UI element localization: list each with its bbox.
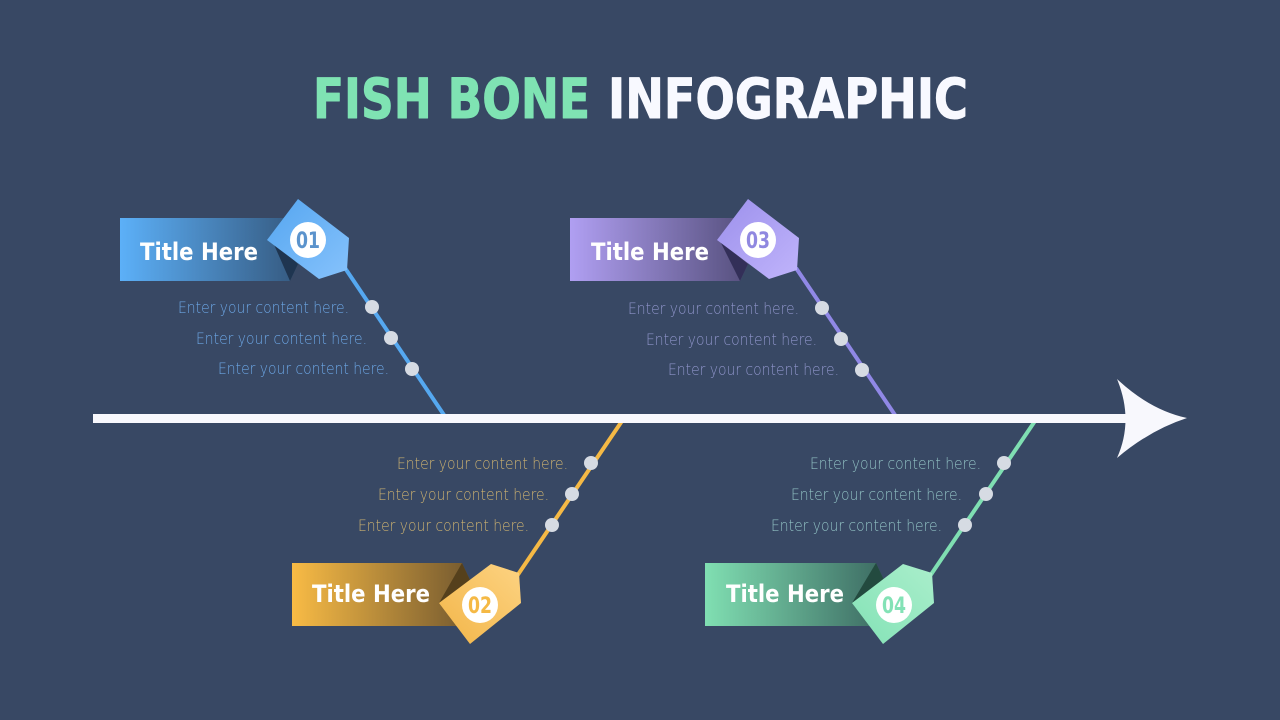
title: FISH BONE <box>313 67 590 131</box>
content list 01 <box>178 298 419 378</box>
content list 01: Enter your content here. <box>178 298 349 317</box>
title banner 01 <box>120 218 298 281</box>
content list 03: Enter your content here. <box>668 360 839 379</box>
title banner 03 <box>570 218 748 281</box>
bone line 02 <box>517 421 622 576</box>
panel: cause 03 <box>570 199 895 415</box>
arrow: fish spine <box>93 379 1187 458</box>
bone line 01 <box>345 268 444 415</box>
title: INFOGRAPHIC <box>608 67 968 131</box>
content list 02 <box>358 454 598 535</box>
number badge 01: 01 <box>296 229 320 254</box>
title <box>313 67 968 131</box>
content list 01: Enter your content here. <box>196 329 367 348</box>
bone line 03 <box>796 268 895 415</box>
content list 03: Enter your content here. <box>628 299 799 318</box>
content list 02: Enter your content here. <box>397 454 568 473</box>
content list 04: Enter your content here. <box>771 516 942 535</box>
number badge 04 <box>852 564 934 644</box>
content list 03 <box>628 299 869 379</box>
number badge 03 <box>717 199 799 279</box>
number badge 03: 03 <box>746 229 770 254</box>
panel: cause 01 <box>120 199 444 415</box>
panel: cause 02 <box>292 421 622 644</box>
content list 02: Enter your content here. <box>358 516 529 535</box>
title banner 02 <box>292 563 470 626</box>
content list 04: Enter your content here. <box>810 454 981 473</box>
number badge 04: 04 <box>882 594 906 619</box>
number badge 02: 02 <box>468 594 492 619</box>
number badge 01 <box>267 199 349 279</box>
content list 04 <box>771 454 1011 535</box>
content list 04: Enter your content here. <box>791 485 962 504</box>
title banner 03: Title Here <box>591 238 709 266</box>
title banner 04: Title Here <box>726 580 844 608</box>
content list 01: Enter your content here. <box>218 359 389 378</box>
content list 03: Enter your content here. <box>646 330 817 349</box>
number badge 02 <box>439 564 521 644</box>
panel: cause 04 <box>705 421 1035 644</box>
content list 02: Enter your content here. <box>378 485 549 504</box>
title banner 04 <box>705 563 884 626</box>
title banner 01: Title Here <box>140 238 258 266</box>
title banner 02: Title Here <box>312 580 430 608</box>
bone line 04 <box>930 421 1035 576</box>
